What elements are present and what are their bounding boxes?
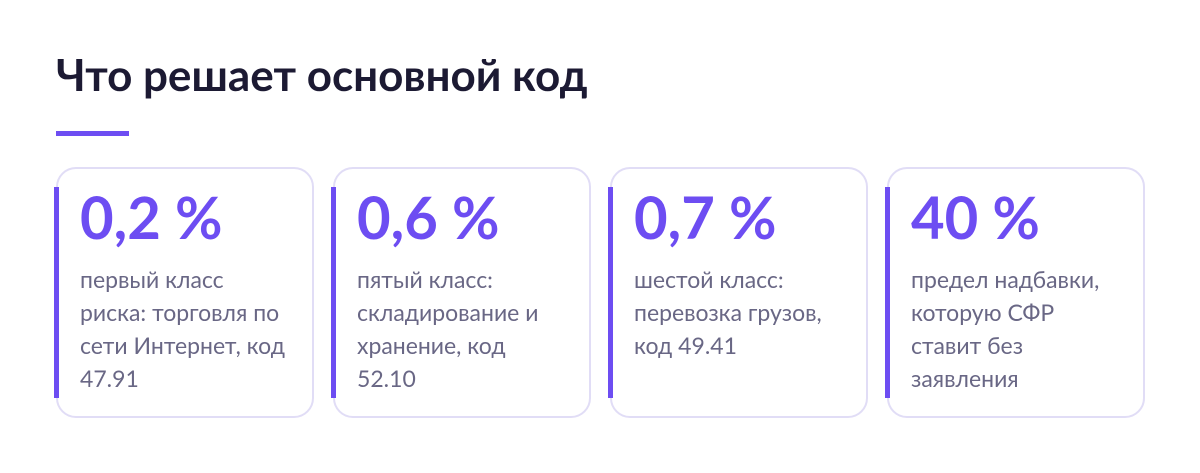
stat value: 0,6 %	[357, 183, 499, 252]
accent bar	[608, 187, 613, 398]
stat description	[357, 265, 538, 392]
accent bar	[54, 187, 59, 398]
stat description: ставит без	[911, 331, 1023, 359]
stat value: 40 %	[911, 183, 1040, 252]
title underline	[56, 131, 129, 136]
panel: first risk class	[56, 167, 314, 418]
stat description: предел надбавки,	[911, 265, 1099, 293]
stat description: складирование и	[357, 298, 538, 326]
stat description	[634, 265, 822, 359]
stat value: 0,2 %	[80, 183, 222, 252]
title: Что решает основной код	[56, 49, 587, 101]
stat description: хранение, код	[357, 331, 506, 359]
stat description: 47.91	[80, 364, 139, 392]
panel: sixth risk class	[610, 167, 868, 418]
stat description: пятый класс:	[357, 265, 493, 293]
stat description: перевозка грузов,	[634, 298, 822, 326]
stat description	[911, 265, 1099, 392]
stat description: заявления	[911, 364, 1019, 392]
stat description: код 49.41	[634, 331, 737, 359]
stat description: которую СФР	[911, 298, 1054, 326]
stat description: 52.10	[357, 364, 416, 392]
stat description	[80, 265, 285, 392]
stat value: 0,7 %	[634, 183, 776, 252]
panel: surcharge limit	[887, 167, 1145, 418]
accent bar	[331, 187, 336, 398]
stat description: первый класс	[80, 265, 224, 293]
stat description: шестой класс:	[634, 265, 784, 293]
accent bar	[885, 187, 890, 398]
stat description: сети Интернет, код	[80, 331, 285, 359]
panel: fifth risk class	[333, 167, 591, 418]
stat description: риска: торговля по	[80, 298, 279, 326]
